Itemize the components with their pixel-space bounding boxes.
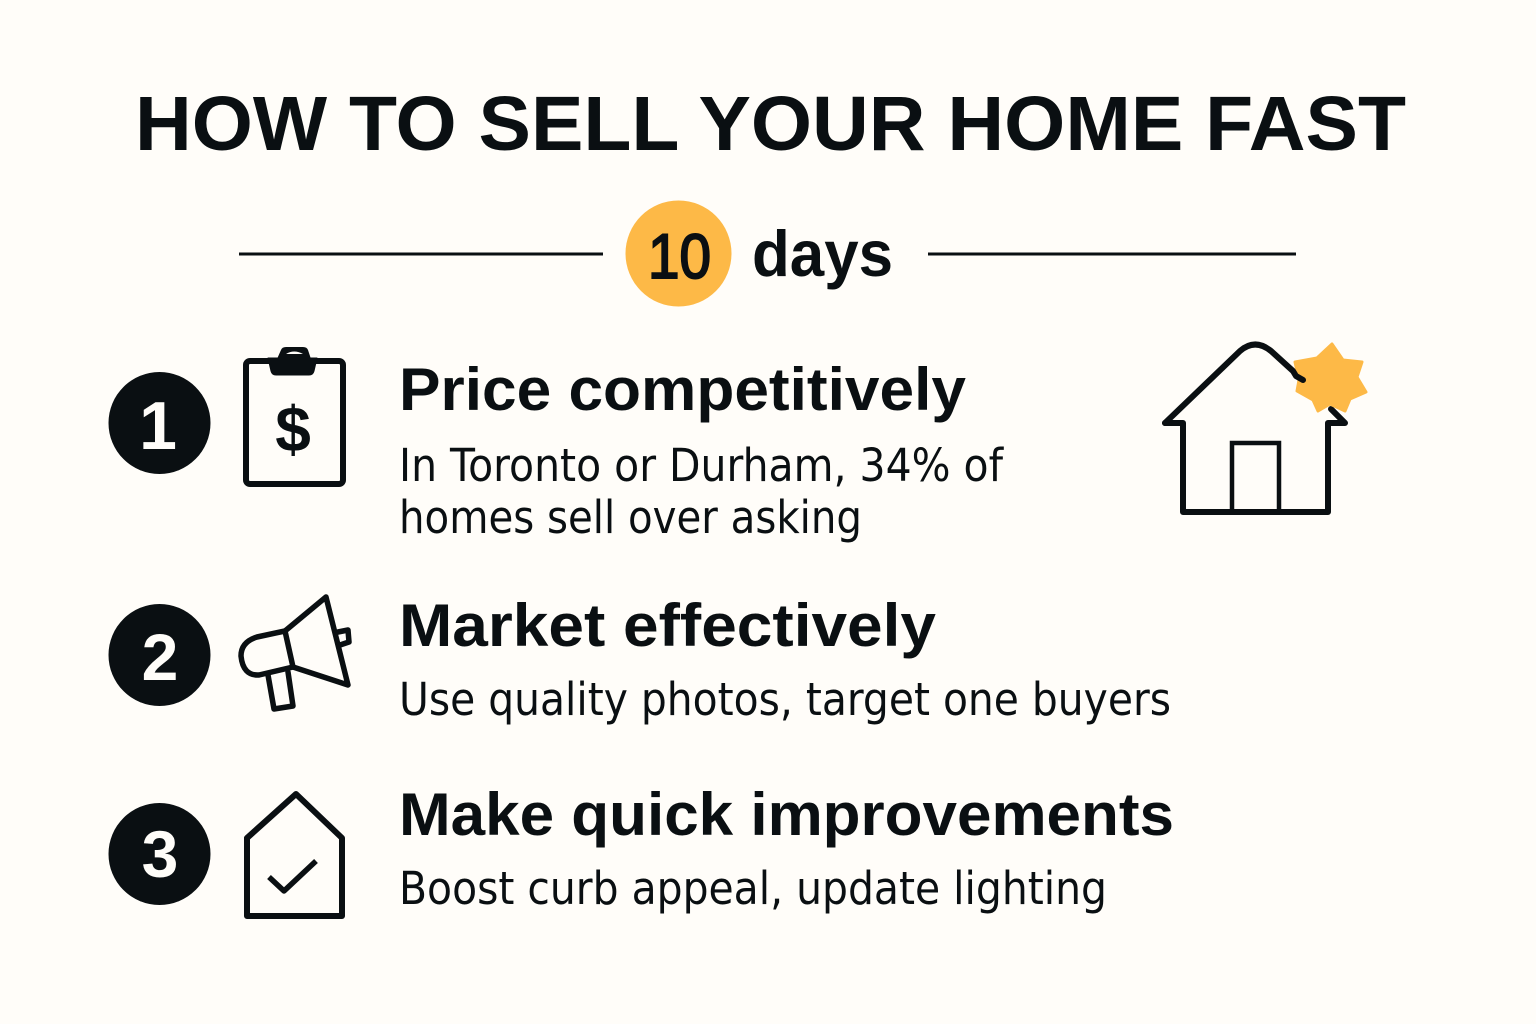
title: HOW TO SELL YOUR HOME FAST xyxy=(135,81,1406,167)
step 1 number xyxy=(108,372,210,474)
step 3 number xyxy=(108,803,210,905)
step 1 description xyxy=(399,439,1004,544)
timeframe badge xyxy=(239,200,1296,306)
step 2 number xyxy=(108,604,210,706)
icon: house with check mark xyxy=(247,794,342,916)
step 1 description: In Toronto or Durham, 34% of xyxy=(399,439,1004,492)
timeframe badge: days xyxy=(752,217,893,290)
step 3 heading: Make quick improvements xyxy=(399,781,1174,848)
step 1 number: 1 xyxy=(139,388,177,464)
step 2 description: Use quality photos, target one buyers xyxy=(399,673,1171,726)
timeframe badge: 10 xyxy=(648,222,711,292)
icon: clipboard with dollar sign xyxy=(246,347,343,484)
step 3 number: 3 xyxy=(142,817,178,891)
step 2 number: 2 xyxy=(142,620,178,694)
step 1 heading: Price competitively xyxy=(399,356,967,423)
icon: clipboard with dollar sign: $ xyxy=(275,393,311,465)
step 1 description: homes sell over asking xyxy=(399,491,862,544)
icon: house with star xyxy=(1165,344,1366,512)
step 2 heading: Market effectively xyxy=(399,592,937,659)
icon: megaphone xyxy=(241,597,349,709)
step 3 description: Boost curb appeal, update lighting xyxy=(399,862,1107,915)
